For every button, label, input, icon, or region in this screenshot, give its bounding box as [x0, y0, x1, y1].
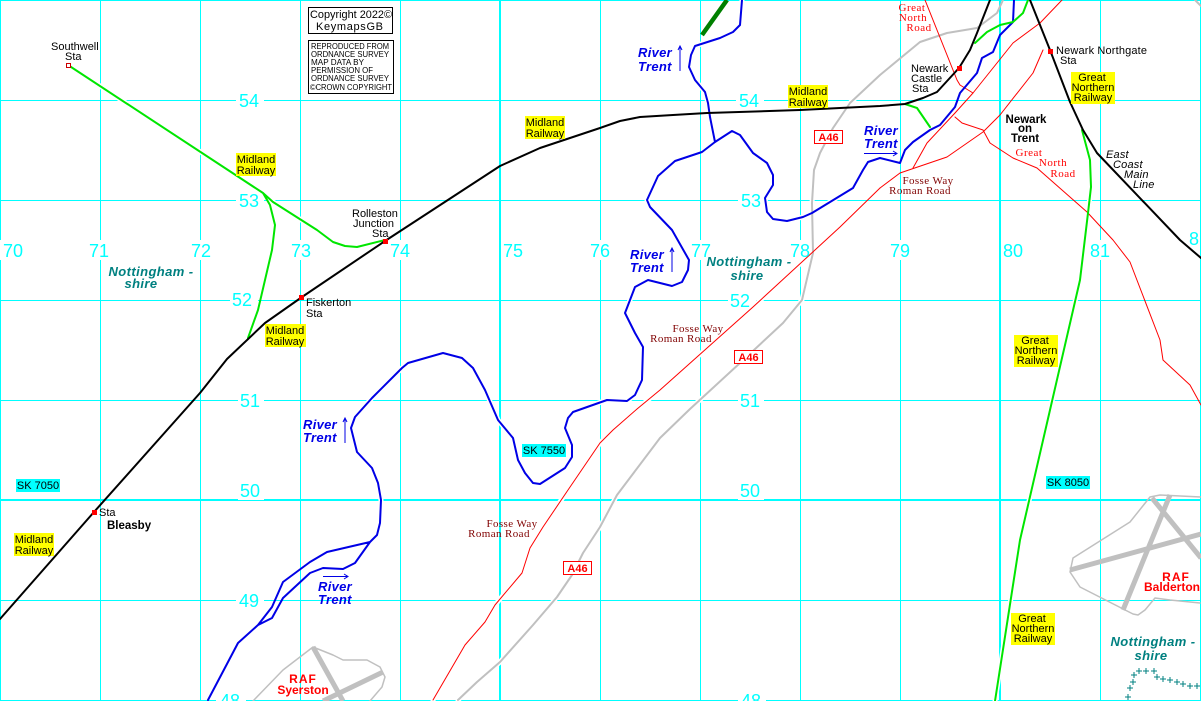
River Trent labels: Trent: [318, 592, 352, 607]
station labels: Sta: [1060, 55, 1077, 67]
RAF labels: Balderton: [1144, 580, 1200, 594]
River Trent labels: Trent: [303, 430, 337, 445]
RAF labels: Syerston: [277, 683, 329, 697]
A46 road labels: A46: [567, 563, 588, 575]
grid numbers: 79: [890, 241, 910, 261]
Fosse Way labels: Fosse Way: [672, 323, 724, 335]
railway name labels: Northern: [1072, 82, 1114, 94]
Fosse Way labels: Fosse Way: [902, 175, 954, 187]
RAF Balderton airfield: [1070, 495, 1201, 615]
grid numbers: 51: [240, 391, 260, 411]
railway name labels: Great: [1078, 72, 1106, 84]
River Trent labels: Trent: [638, 59, 672, 74]
station labels: Sta: [99, 507, 116, 519]
station labels: Newark Northgate: [1056, 45, 1147, 57]
Fosse Way Roman road: [433, 0, 1062, 700]
railway main line: [0, 0, 990, 619]
station labels: Sta: [372, 228, 389, 240]
copyright box: Copyright 2022©: [310, 9, 392, 21]
railway name labels: Railway: [237, 165, 276, 177]
Ordnance Survey notice: ORDNANCE SURVEY: [311, 74, 390, 83]
Ordnance Survey notice: ORDNANCE SURVEY: [311, 50, 390, 59]
county labels: shire: [730, 268, 764, 283]
county boundary crosses: [1125, 668, 1200, 700]
grid numbers: 81: [1090, 241, 1110, 261]
Fosse Way labels: [468, 175, 954, 540]
county labels: shire: [124, 276, 158, 291]
RAF Syerston airfield: [253, 647, 385, 701]
Ordnance Survey notice: [308, 40, 394, 94]
Midland Railway green lines: [68, 0, 1028, 338]
East Coast Main Line label: Line: [1133, 179, 1155, 191]
grid numbers: 54: [239, 91, 259, 111]
A46 road: [458, 0, 1201, 700]
Great North Road labels: Road: [906, 22, 932, 34]
Fosse Way labels: Roman Road: [468, 528, 530, 540]
grid square labels: SK 7550: [523, 445, 565, 457]
Fosse Way labels: Fosse Way: [486, 518, 538, 530]
railway name labels: Midland: [526, 117, 564, 129]
Ordnance Survey notice: REPRODUCED FROM: [311, 42, 389, 51]
River Trent labels: River: [318, 579, 353, 594]
station labels: Sta: [306, 308, 323, 320]
county labels: shire: [1134, 648, 1168, 663]
Ordnance Survey notice: PERMISSION OF: [311, 66, 373, 75]
Ordnance Survey notice: MAP DATA BY: [311, 58, 365, 67]
Ordnance Survey notice: ©CROWN COPYRIGHT: [310, 83, 392, 92]
grid square labels: [16, 444, 1090, 492]
grid numbers: 80: [1003, 241, 1023, 261]
county labels: Nottingham -: [109, 264, 193, 279]
railway name labels: [14, 72, 1115, 645]
River Trent labels: River: [630, 247, 665, 262]
East Coast Main Line label: East: [1106, 149, 1130, 161]
railway name labels: Railway: [789, 97, 828, 109]
railway name labels: Railway: [526, 128, 565, 140]
county labels: [109, 254, 1195, 663]
grid numbers: 50: [740, 481, 760, 501]
Great North Road labels: Road: [1050, 168, 1076, 180]
grid numbers: 76: [590, 241, 610, 261]
grid numbers: 72: [191, 241, 211, 261]
River Trent labels: Trent: [864, 136, 898, 151]
River Trent labels: River: [638, 45, 673, 60]
Great North Road labels: Great: [1016, 147, 1042, 159]
Great North Road labels: North: [899, 12, 927, 24]
grid numbers: 52: [232, 290, 252, 310]
Great North Road: [880, 0, 1201, 405]
Great North Road labels: North: [1039, 157, 1067, 169]
railway name labels: Railway: [266, 336, 305, 348]
railway name labels: Midland: [15, 534, 53, 546]
Great North Road labels: Great: [899, 2, 925, 14]
station labels: Rolleston: [352, 208, 398, 220]
grid numbers: 8: [1189, 229, 1199, 249]
grid square labels: SK 7050: [17, 480, 59, 492]
station labels: [51, 41, 1147, 532]
East Coast Main Line: [1030, 0, 1201, 258]
copyright box: [308, 8, 392, 34]
East Coast Main Line label: Coast: [1113, 159, 1143, 171]
grid numbers: 70: [3, 241, 23, 261]
River Trent labels: River: [864, 123, 899, 138]
town label: on: [1018, 123, 1032, 135]
railway name labels: Railway: [1074, 92, 1113, 104]
railway name labels: Midland: [789, 86, 827, 98]
Fosse Way labels: Roman Road: [650, 333, 712, 345]
grid numbers: 75: [503, 241, 523, 261]
Great Northern Railway green line: [995, 130, 1091, 701]
River Trent labels: River: [303, 417, 338, 432]
station labels: Castle: [911, 73, 942, 85]
grid numbers: 51: [740, 391, 760, 411]
A46 road labels: [564, 130, 842, 575]
RAF labels: RAF: [289, 672, 317, 686]
River Trent: [208, 0, 1014, 700]
dark green line: [702, 0, 727, 35]
railway name labels: Midland: [237, 154, 275, 166]
county labels: Nottingham -: [1111, 634, 1195, 649]
River Trent labels: [303, 45, 899, 607]
railway name labels: Railway: [15, 545, 54, 557]
RAF labels: [277, 570, 1200, 697]
station labels: Newark: [911, 63, 949, 75]
station labels: Fiskerton: [306, 297, 351, 309]
county labels: Nottingham -: [707, 254, 791, 269]
East Coast Main Line label: Main: [1124, 169, 1149, 181]
grid numbers: 78: [790, 241, 810, 261]
grid numbers: 52: [730, 291, 750, 311]
grid numbers: 71: [89, 241, 109, 261]
town label: Trent: [1011, 133, 1039, 145]
A46 road labels: A46: [818, 132, 839, 144]
grid numbers: 74: [390, 241, 410, 261]
railway name labels: Railway: [1017, 355, 1056, 367]
copyright box: KeymapsGB: [316, 21, 383, 33]
grid numbers: 53: [239, 191, 259, 211]
station labels: Sta: [65, 51, 82, 63]
railway name labels: Northern: [1015, 345, 1057, 357]
station labels: Southwell: [51, 41, 99, 53]
town label: Newark: [1006, 114, 1047, 126]
railway name labels: Great: [1018, 613, 1046, 625]
Great North Road labels: [899, 2, 1076, 180]
grid square labels: SK 8050: [1047, 477, 1089, 489]
grid numbers: 53: [741, 191, 761, 211]
railway name labels: Midland: [266, 325, 304, 337]
grid numbers: 50: [240, 481, 260, 501]
East Coast Main Line label: [1106, 149, 1155, 191]
grid numbers: 49: [239, 591, 259, 611]
River Trent labels: Trent: [630, 260, 664, 275]
RAF labels: RAF: [1162, 570, 1190, 584]
station labels: Bleasby: [107, 520, 152, 532]
grid numbers: 77: [691, 241, 711, 261]
grid numbers: 73: [291, 241, 311, 261]
railway name labels: Great: [1021, 335, 1049, 347]
Fosse Way labels: Roman Road: [889, 185, 951, 197]
stations: [66, 49, 1053, 515]
grid numbers: 54: [739, 91, 759, 111]
station labels: Sta: [912, 83, 929, 95]
A46 road labels: A46: [738, 352, 759, 364]
railway name labels: Railway: [1014, 633, 1053, 645]
town label: [1006, 114, 1047, 145]
railway name labels: Northern: [1012, 623, 1054, 635]
station labels: Junction: [353, 218, 394, 230]
